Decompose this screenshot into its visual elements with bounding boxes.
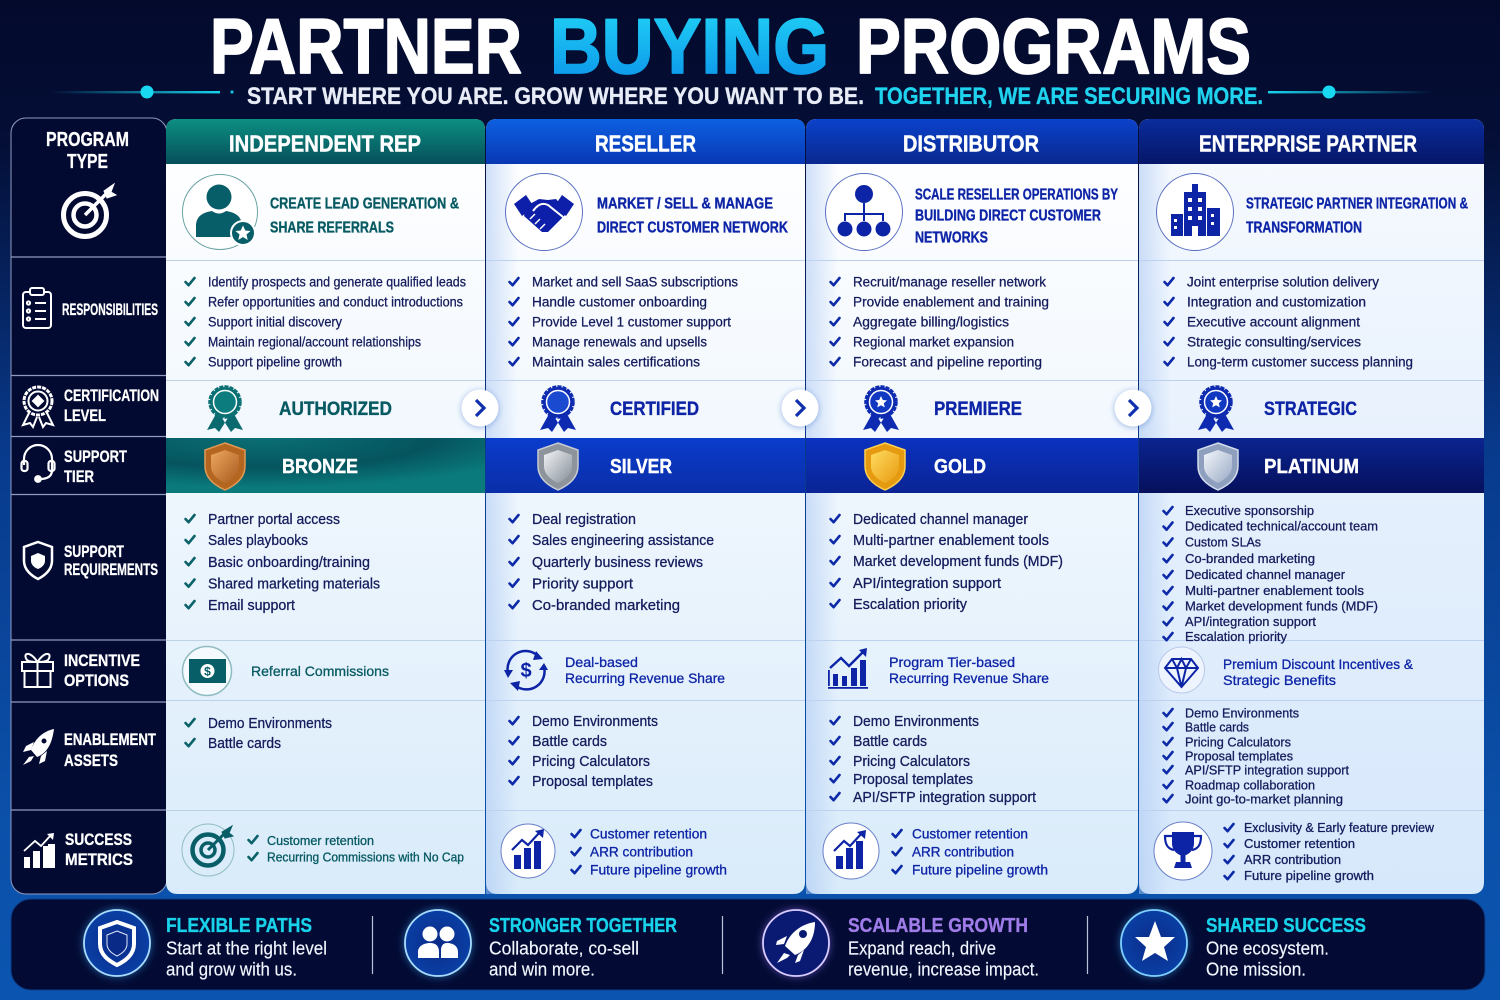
checks — [186, 515, 194, 608]
enablement list: Battle cards — [1185, 720, 1249, 734]
support list: Co-branded marketing — [1185, 551, 1315, 566]
certification name: PREMIERE — [934, 398, 1022, 420]
responsibilities list: Integration and customization — [1187, 294, 1366, 310]
label: program type: TYPE — [67, 151, 108, 173]
success metrics list: Customer retention — [267, 834, 374, 848]
support list: Co-branded marketing — [532, 598, 680, 614]
tier band — [166, 438, 485, 493]
benefit: scalable growth: Expand reach, drive — [848, 938, 996, 958]
program description: MARKET / SELL & MANAGE — [597, 196, 773, 212]
enablement list: Pricing Calculators — [1185, 734, 1291, 750]
icon: premiere ribbon — [863, 387, 899, 432]
support list: Market development funds (MDF) — [853, 554, 1063, 570]
support list: Priority support — [532, 576, 633, 592]
panel: distributor — [806, 119, 1138, 894]
success metrics list — [267, 834, 464, 864]
icon: gold shield — [865, 443, 905, 490]
icon: handshake — [506, 174, 582, 250]
panel: row labels — [11, 118, 167, 894]
subtitle — [247, 83, 1263, 110]
checks — [830, 278, 840, 365]
tier name: GOLD — [934, 455, 986, 478]
benefit: shared success: SHARED SUCCESS — [1206, 914, 1366, 937]
support list: Email support — [208, 598, 295, 614]
checks — [248, 836, 258, 860]
success metrics list: Customer retention — [590, 826, 707, 842]
benefit: shared success — [1120, 909, 1366, 980]
responsibilities list: Support initial discovery — [208, 314, 342, 330]
program description: BUILDING DIRECT CUSTOMER — [915, 208, 1101, 224]
icon: org chart — [826, 174, 902, 250]
responsibilities list: Forecast and pipeline reporting — [853, 354, 1042, 370]
checks — [1164, 709, 1172, 802]
title: PARTNER — [210, 2, 522, 90]
icon: success chart — [501, 824, 555, 878]
program description: SCALE RESELLER OPERATIONS BY — [915, 186, 1118, 204]
benefit: flexible paths — [83, 909, 327, 980]
label: certification level — [64, 386, 159, 425]
enablement list — [1185, 706, 1349, 806]
arrow: premiere to strategic — [1114, 390, 1152, 428]
icon: banknote: $ — [204, 664, 211, 678]
success metrics list: ARR contribution — [912, 844, 1014, 860]
icon: silver shield — [538, 443, 578, 490]
success metrics list — [590, 826, 727, 878]
benefit: stronger together: and win more. — [489, 960, 595, 980]
checks — [1224, 824, 1234, 879]
checks — [830, 717, 840, 800]
label: program type: PROGRAM — [46, 129, 129, 151]
responsibilities list — [532, 274, 738, 370]
enablement list: Demo Environments — [532, 714, 658, 730]
title: PROGRAMS — [856, 2, 1251, 90]
enablement list: Pricing Calculators — [532, 754, 650, 770]
success metrics list: ARR contribution — [1244, 853, 1341, 867]
enablement list: Demo Environments — [208, 716, 332, 732]
program description: NETWORKS — [915, 230, 988, 246]
icon: certification — [23, 387, 53, 427]
certification name: STRATEGIC — [1264, 398, 1357, 420]
checks — [1164, 507, 1172, 640]
icon: gift — [22, 654, 53, 687]
label: incentive options: INCENTIVE — [64, 651, 140, 670]
arrow: authorized to certified — [461, 390, 499, 428]
support list: Custom SLAs — [1185, 534, 1261, 550]
panel: independent rep — [166, 119, 485, 894]
benefit: stronger together: Collaborate, co-sell — [489, 938, 639, 958]
checks — [186, 278, 194, 365]
icon: rocket — [23, 729, 54, 765]
responsibilities list: Provide Level 1 customer support — [532, 314, 731, 330]
icon: headset — [22, 445, 54, 482]
icon: authorized ribbon — [207, 387, 243, 432]
incentive text: Deal-based — [565, 654, 638, 670]
support list: Quarterly business reviews — [532, 555, 703, 571]
support list: Sales engineering assistance — [532, 533, 714, 549]
label: support requirements — [64, 542, 158, 579]
label: support tier: SUPPORT — [64, 447, 127, 466]
icon: strategic ribbon — [1198, 387, 1234, 432]
checks — [510, 278, 518, 365]
incentive text: Strategic Benefits — [1223, 672, 1336, 688]
support list: Shared marketing materials — [208, 576, 380, 592]
benefit: stronger together: STRONGER TOGETHER — [489, 914, 677, 937]
checks — [892, 830, 902, 873]
support list — [532, 512, 714, 614]
checks — [510, 515, 518, 608]
label: program type — [46, 129, 129, 173]
responsibilities list: Long-term customer success planning — [1187, 354, 1413, 370]
icon: recurring dollar — [504, 651, 548, 691]
label: support tier: TIER — [64, 467, 94, 486]
success metrics list: Exclusivity & Early feature preview — [1244, 821, 1435, 835]
label: responsibilities: RESPONSIBILITIES — [62, 300, 158, 319]
label: enablement assets: ENABLEMENT — [64, 730, 156, 749]
enablement list: Proposal templates — [1185, 748, 1293, 764]
enablement list: Demo Environments — [1185, 706, 1299, 720]
program description — [915, 186, 1118, 246]
label: enablement assets — [64, 730, 156, 770]
responsibilities list: Executive account alignment — [1187, 314, 1360, 330]
icon: target — [64, 184, 116, 236]
label: support requirements: SUPPORT — [64, 542, 124, 561]
program description — [597, 196, 788, 236]
checks — [830, 515, 840, 607]
responsibilities list: Maintain regional/account relationships — [208, 334, 421, 350]
support list: API/integration support — [853, 576, 1001, 592]
success metrics list: Customer retention — [1244, 837, 1355, 851]
responsibilities list: Refer opportunities and conduct introductions — [208, 294, 463, 310]
label: support requirements: REQUIREMENTS — [64, 560, 158, 579]
support list: Escalation priority — [1185, 629, 1287, 644]
responsibilities list: Manage renewals and upsells — [532, 334, 707, 350]
tier band — [1139, 438, 1484, 493]
benefit: shared success: One ecosystem. — [1206, 938, 1329, 958]
panel: reseller — [486, 119, 805, 894]
icon: bronze shield — [205, 443, 245, 490]
program description: DIRECT CUSTOMER NETWORK — [597, 220, 788, 236]
tier name: BRONZE — [282, 455, 358, 478]
success metrics list: Customer retention — [912, 826, 1028, 842]
responsibilities list — [1187, 274, 1413, 370]
label: incentive options — [64, 651, 140, 690]
incentive text — [1223, 656, 1414, 688]
decorative line left — [50, 86, 234, 98]
label: enablement assets: ASSETS — [64, 751, 118, 770]
subtitle: START WHERE YOU ARE. GROW WHERE YOU WANT TO BE. — [247, 83, 864, 110]
success metrics list: ARR contribution — [590, 844, 693, 860]
enablement list: Proposal templates — [532, 774, 653, 790]
enablement list: Demo Environments — [853, 714, 979, 730]
support list: Dedicated channel manager — [1185, 567, 1346, 582]
icon: success chart — [823, 823, 879, 879]
benefit: flexible paths: FLEXIBLE PATHS — [166, 914, 312, 937]
certification name: AUTHORIZED — [279, 398, 392, 420]
icon: certified ribbon — [540, 387, 576, 432]
icon: platinum shield — [1198, 443, 1238, 490]
responsibilities list: Handle customer onboarding — [532, 294, 707, 310]
support list: Partner portal access — [208, 512, 340, 528]
success metrics list: Future pipeline growth — [1244, 869, 1374, 883]
label: success metrics: METRICS — [65, 850, 133, 869]
icon: person with star — [182, 174, 258, 250]
icon: clipboard — [23, 288, 51, 328]
responsibilities list: Strategic consulting/services — [1187, 334, 1361, 350]
enablement list: Roadmap collaboration — [1185, 778, 1315, 792]
support list — [853, 512, 1063, 613]
support list: Executive sponsorship — [1185, 503, 1314, 518]
checks — [510, 717, 518, 784]
panel: bottom benefits band — [11, 899, 1485, 990]
responsibilities list: Aggregate billing/logistics — [853, 314, 1009, 330]
column heading: RESELLER — [595, 130, 696, 156]
incentive text: Premium Discount Incentives & — [1223, 656, 1414, 672]
benefit: flexible paths: Start at the right level — [166, 938, 327, 958]
subtitle: TOGETHER, WE ARE SECURING MORE. — [875, 83, 1263, 110]
checks — [1164, 278, 1174, 365]
enablement list — [853, 714, 1036, 806]
tier name: SILVER — [610, 455, 672, 478]
incentive text: Recurring Revenue Share — [889, 670, 1049, 686]
program description — [1246, 196, 1468, 236]
enablement list: Battle cards — [532, 734, 607, 750]
enablement list: Proposal templates — [853, 772, 973, 788]
tier band — [486, 438, 805, 493]
icon: growth bars — [24, 833, 55, 868]
program description: TRANSFORMATION — [1246, 220, 1362, 236]
incentive text — [889, 654, 1049, 686]
support list: Dedicated channel manager — [853, 512, 1028, 528]
icon: shield — [24, 542, 52, 579]
icon: buildings — [1156, 174, 1234, 250]
responsibilities list: Regional market expansion — [853, 334, 1014, 350]
program description: CREATE LEAD GENERATION & — [270, 196, 459, 212]
tier band — [806, 438, 1138, 493]
benefit: scalable growth: revenue, increase impact. — [848, 960, 1039, 980]
success metrics list: Future pipeline growth — [590, 862, 727, 878]
support list: Market development funds (MDF) — [1185, 598, 1378, 614]
incentive text: Recurring Revenue Share — [565, 670, 725, 686]
enablement list — [532, 714, 658, 790]
icon: incentive chart — [828, 648, 868, 689]
enablement list: API/SFTP integration support — [853, 790, 1036, 806]
title: BUYING — [550, 2, 829, 90]
benefit: stronger together — [404, 909, 677, 980]
responsibilities list: Maintain sales certifications — [532, 354, 700, 370]
label: success metrics: SUCCESS — [65, 830, 132, 849]
label: success metrics — [65, 830, 133, 869]
icon: diamond — [1158, 647, 1204, 693]
responsibilities list: Identify prospects and generate qualified leads — [208, 274, 466, 290]
enablement list — [208, 716, 332, 752]
label: certification level: CERTIFICATION — [64, 386, 159, 405]
support list: Basic onboarding/training — [208, 555, 370, 571]
benefit: flexible paths: and grow with us. — [166, 960, 297, 980]
responsibilities list: Market and sell SaaS subscriptions — [532, 274, 738, 290]
icon: recurring dollar: $ — [520, 660, 532, 682]
support list: Sales playbooks — [208, 533, 308, 549]
icon: success target — [182, 824, 234, 876]
enablement list: Joint go-to-market planning — [1185, 792, 1343, 806]
enablement list: Battle cards — [853, 734, 927, 750]
label: certification level: LEVEL — [64, 406, 106, 425]
benefit: scalable growth — [762, 909, 1039, 980]
checks — [572, 830, 580, 873]
decorative line right — [1268, 86, 1433, 98]
support list: Deal registration — [532, 512, 636, 528]
panel: enterprise partner — [1139, 119, 1484, 894]
program description: SHARE REFERRALS — [270, 220, 394, 236]
certification name: CERTIFIED — [610, 398, 699, 420]
support list: API/integration support — [1185, 614, 1316, 629]
column heading: DISTRIBUTOR — [903, 130, 1039, 156]
responsibilities list — [208, 274, 466, 370]
incentive text: Program Tier-based — [889, 654, 1015, 670]
responsibilities list: Support pipeline growth — [208, 354, 342, 370]
success metrics list: Future pipeline growth — [912, 862, 1048, 878]
responsibilities list — [853, 274, 1049, 370]
responsibilities list: Joint enterprise solution delivery — [1187, 274, 1379, 290]
program description — [270, 196, 459, 236]
responsibilities list: Provide enablement and training — [853, 294, 1049, 310]
success metrics list: Recurring Commissions with No Cap — [267, 850, 464, 864]
support list: Multi-partner enablement tools — [1185, 583, 1365, 598]
success metrics list — [912, 826, 1048, 878]
benefit: scalable growth: SCALABLE GROWTH — [848, 914, 1028, 937]
incentive text — [565, 654, 725, 686]
support list: Dedicated technical/account team — [1185, 518, 1378, 534]
label: incentive options: OPTIONS — [64, 671, 129, 690]
support list — [208, 512, 380, 614]
title — [210, 2, 1251, 90]
column heading: ENTERPRISE PARTNER — [1199, 130, 1417, 156]
support list — [1185, 503, 1378, 644]
responsibilities list: Recruit/manage reseller network — [853, 274, 1046, 290]
success metrics list — [1244, 821, 1435, 883]
enablement list: Pricing Calculators — [853, 754, 970, 770]
tier name: PLATINUM — [1264, 455, 1359, 478]
enablement list: Battle cards — [208, 736, 281, 752]
column heading: INDEPENDENT REP — [229, 130, 421, 156]
icon: banknote — [182, 646, 232, 696]
benefit: shared success: One mission. — [1206, 960, 1306, 980]
checks — [186, 719, 194, 746]
label: support tier — [64, 447, 127, 486]
icon: trophy — [1154, 822, 1212, 880]
arrow: certified to premiere — [781, 390, 819, 428]
incentive text: Referral Commissions — [251, 663, 389, 679]
support list: Escalation priority — [853, 597, 968, 613]
enablement list: API/SFTP integration support — [1185, 762, 1349, 778]
support list: Multi-partner enablement tools — [853, 533, 1049, 549]
